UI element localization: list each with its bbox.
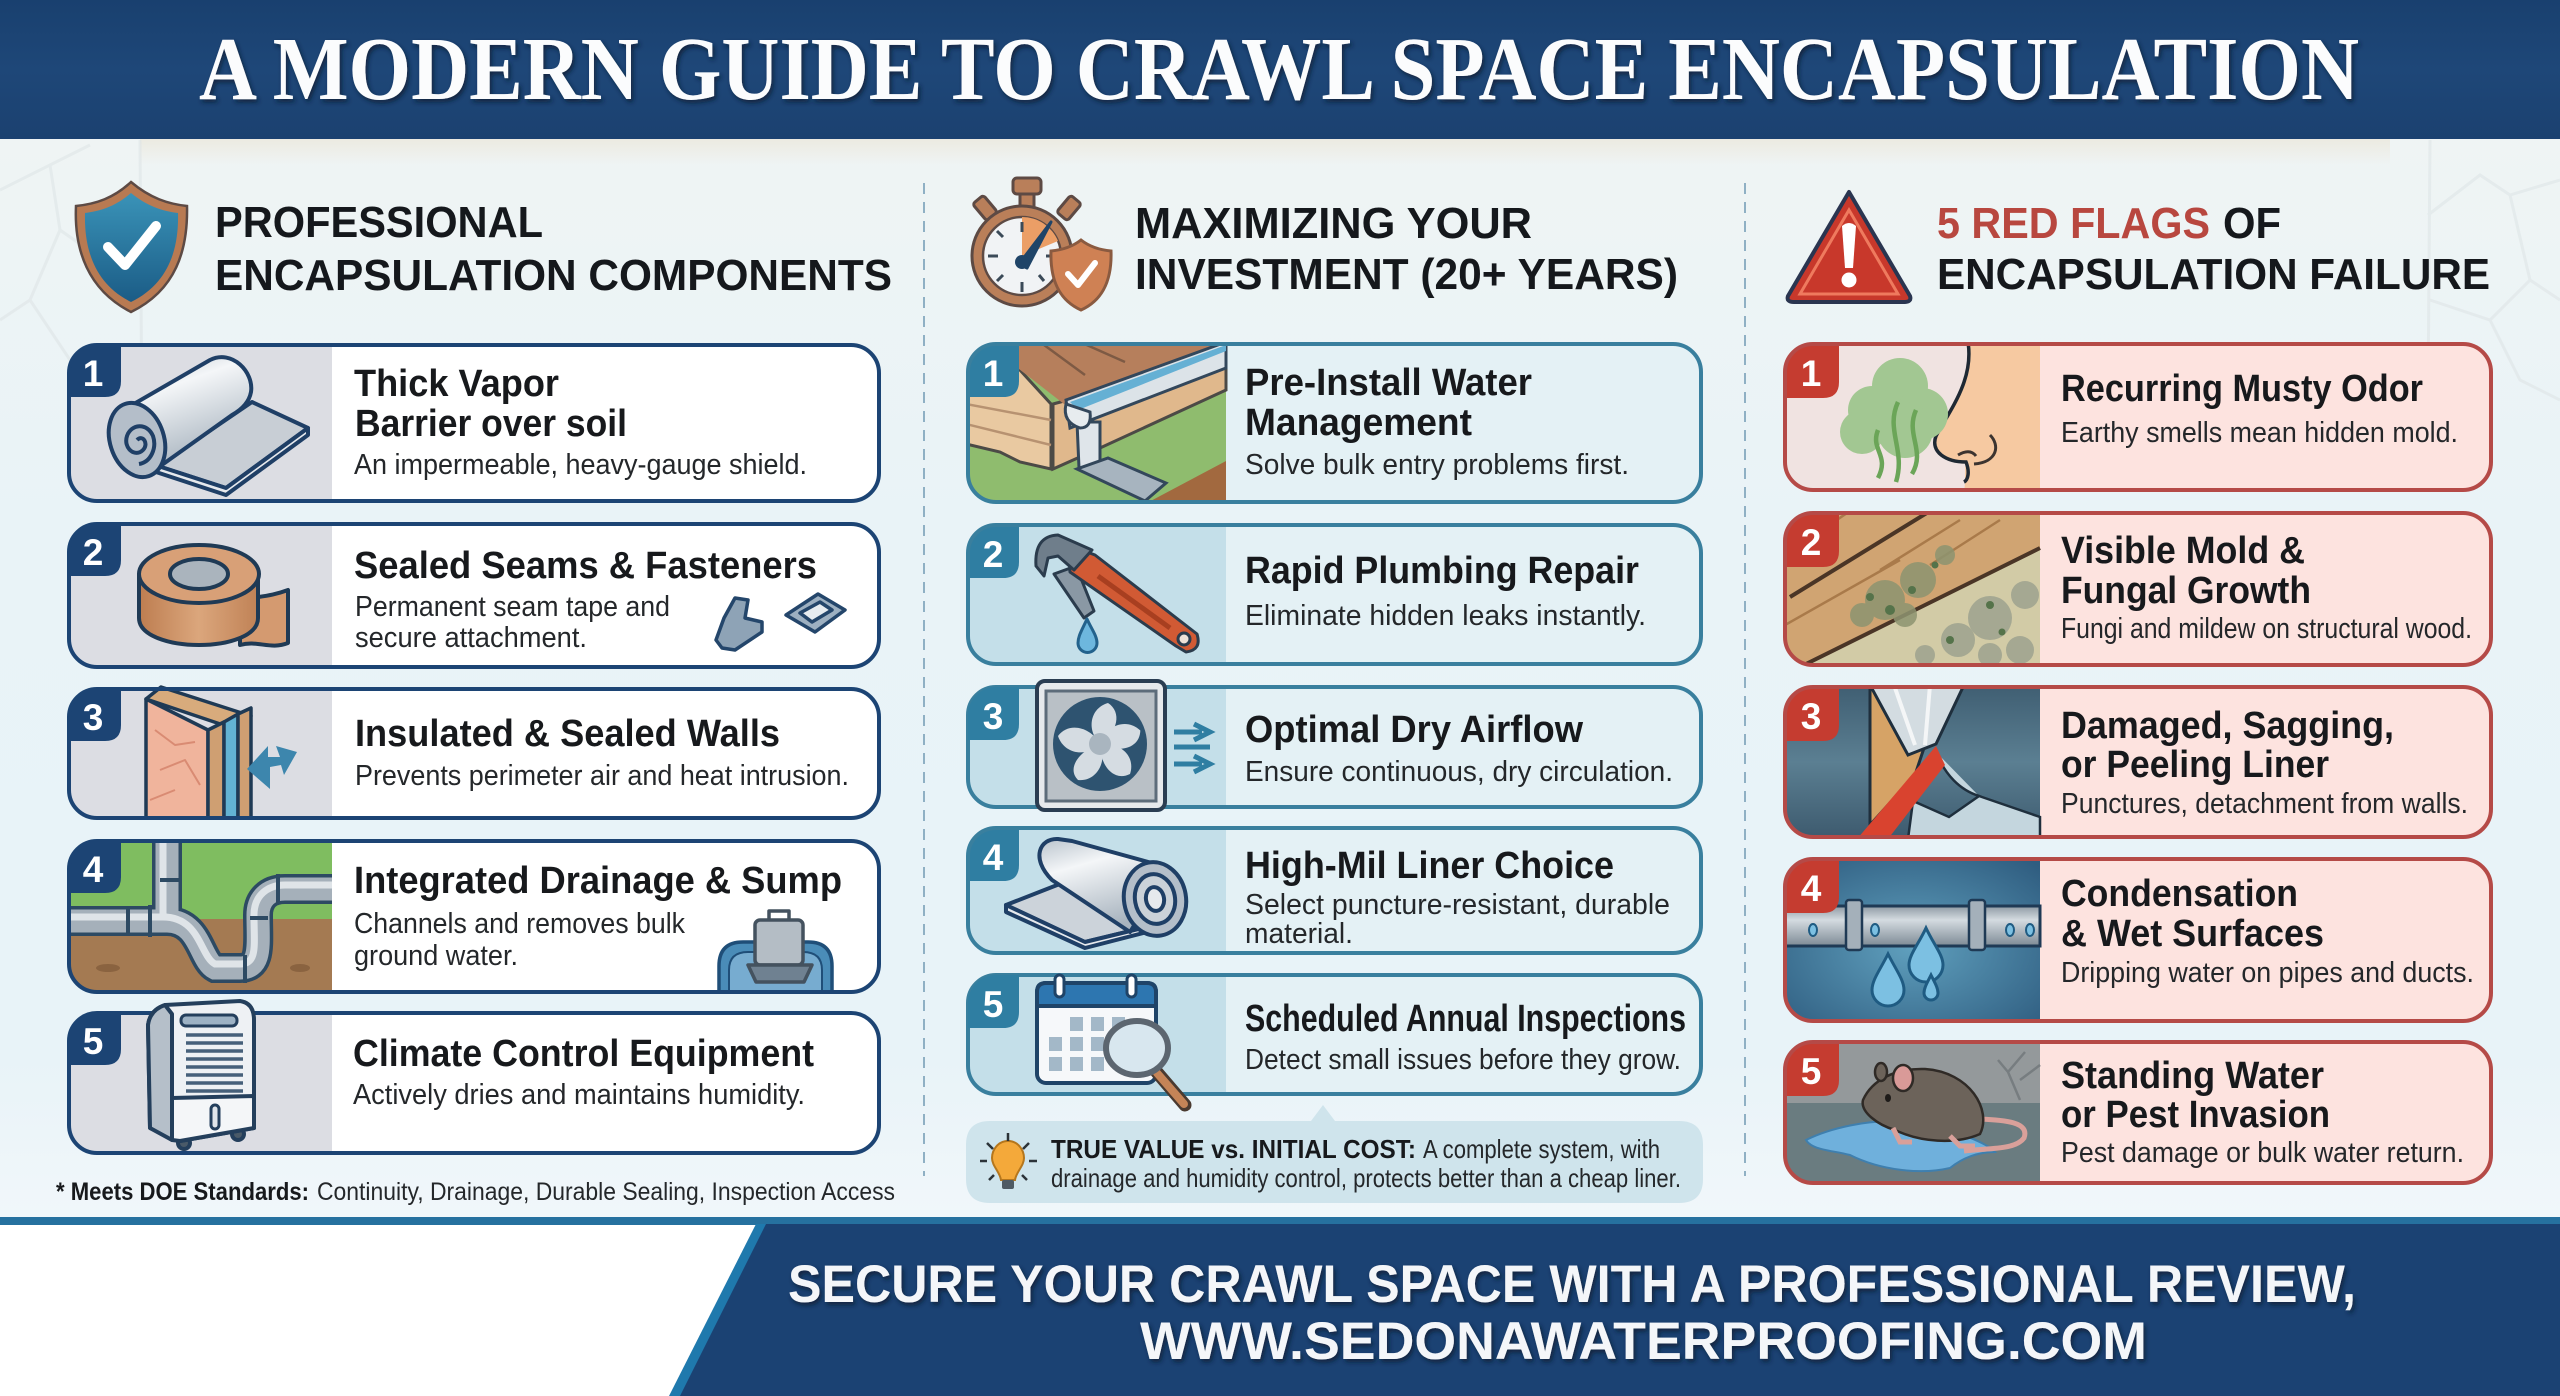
badge: 2: 2 (83, 532, 103, 573)
column 1: professional encapsulation components (56, 182, 895, 1206)
icon: stopwatch with shield (972, 178, 1111, 310)
card text: Visible Mold & (2061, 530, 2305, 572)
card text (2061, 873, 2474, 989)
card 2: visible mold and fungal growth (1783, 511, 2491, 667)
badge: 4: 4 (83, 849, 104, 890)
heading: professional encapsulation components: PROFESSIONAL (215, 198, 543, 247)
card text (1245, 362, 1629, 481)
badge: 3: 3 (1801, 696, 1821, 737)
card text: Select puncture-resistant, durable (1245, 889, 1670, 921)
card text (1245, 550, 1646, 632)
badge: 5: 5 (83, 1021, 103, 1062)
badge: 2 (1787, 515, 1839, 567)
card 1: pre-install water management (966, 342, 1701, 504)
icon: fasteners (716, 594, 845, 650)
icon: light bulb (980, 1133, 1037, 1189)
card text: ground water. (354, 940, 518, 972)
card 1: recurring musty odor (1783, 342, 2491, 492)
badge: 3: 3 (983, 696, 1003, 737)
card text: Punctures, detachment from walls. (2061, 788, 2468, 820)
icon: pipe wrench and drop (1036, 535, 1198, 652)
badge: 4 (1787, 861, 1839, 913)
badge: 3 (71, 691, 121, 741)
card text: Pest damage or bulk water return. (2061, 1137, 2464, 1169)
call to action: WWW.SEDONAWATERPROOFING.COM (1140, 1312, 2147, 1371)
column 3: red flags of encapsulation failure (1783, 192, 2491, 1185)
icon: sump pump (719, 911, 832, 992)
card text: Rapid Plumbing Repair (1245, 550, 1639, 592)
heading: maximizing your investment: INVESTMENT (20+ YEARS) (1135, 250, 1678, 299)
card 4: integrated drainage and sump (67, 839, 879, 994)
card text (2061, 368, 2458, 449)
illustration: torn liner (1783, 685, 2040, 839)
card 5: scheduled annual inspections (966, 973, 1701, 1105)
illustration: nose and musty cloud (1783, 342, 2040, 492)
heading: professional encapsulation components: ENCAPSULATION COMPONENTS (215, 251, 892, 300)
icon: warning triangle (1788, 192, 1910, 302)
card text: or Pest Invasion (2061, 1094, 2330, 1136)
card text (2061, 530, 2472, 645)
card text: Insulated & Sealed Walls (355, 713, 780, 755)
badge: 4: 4 (1801, 868, 1822, 909)
badge: 2: 2 (1801, 522, 1821, 563)
card text: Pre-Install Water (1245, 362, 1532, 404)
icon: airflow arrows (1174, 724, 1210, 772)
card text: Thick Vapor (354, 363, 559, 405)
footnote: DOE standards: Continuity, Drainage, Durable Sealing, Inspection Access (317, 1178, 895, 1206)
card text (1245, 845, 1670, 950)
illustration: dripping pipe (1783, 857, 2040, 1023)
icon: insulated wall (146, 687, 251, 818)
badge: 1: 1 (83, 353, 103, 394)
card 5: climate control equipment (67, 1001, 879, 1155)
card text: Solve bulk entry problems first. (1245, 449, 1629, 481)
call to action (788, 1255, 2356, 1371)
card text: Climate Control Equipment (353, 1033, 814, 1075)
badge: 1: 1 (983, 353, 1003, 394)
badge: 2 (71, 526, 121, 576)
card text: Earthy smells mean hidden mold. (2061, 417, 2458, 449)
badge: 1 (1787, 346, 1839, 398)
illustration: gutter and downspout (966, 342, 1226, 504)
card text: Standing Water (2061, 1055, 2324, 1097)
callout: true value vs. initial cost (966, 1105, 1703, 1203)
card text: Actively dries and maintains humidity. (353, 1079, 805, 1111)
column 2: maximizing your investment (966, 178, 1703, 1203)
card text: High-Mil Liner Choice (1245, 845, 1614, 887)
badge: 4 (71, 843, 121, 893)
card text: secure attachment. (355, 622, 587, 654)
badge: 1 (970, 346, 1019, 397)
card text (2061, 705, 2468, 820)
card text (354, 860, 842, 972)
footer banner (0, 1217, 2560, 1396)
card 5: standing water or pest invasion (1783, 1040, 2491, 1185)
card text (355, 713, 849, 792)
card text: Fungal Growth (2061, 570, 2311, 612)
badge: 5 (966, 973, 1019, 1028)
badge: 5: 5 (983, 984, 1003, 1025)
illustration: moldy wood (1783, 511, 2040, 667)
card text: Detect small issues before they grow. (1245, 1044, 1681, 1076)
badge: 5 (1783, 1040, 1839, 1096)
badge: 5: 5 (1801, 1051, 1821, 1092)
heading: red flags: ENCAPSULATION FAILURE (1937, 250, 2490, 299)
badge: 1 (71, 347, 121, 397)
badge: 4: 4 (983, 837, 1004, 878)
card 2: sealed seams and fasteners (67, 522, 879, 669)
badge: 2: 2 (983, 534, 1003, 575)
icon: shield with check (76, 182, 187, 312)
card 4: high-mil liner choice (966, 826, 1701, 955)
heading: red flags: 5 RED FLAGS (1937, 199, 2210, 248)
card text (354, 545, 817, 654)
card 1: thick vapor barrier (67, 343, 879, 503)
card text: Damaged, Sagging, (2061, 705, 2394, 747)
title: A MODERN GUIDE TO CRAWL SPACE ENCAPSULATION (199, 20, 2359, 119)
card text: Ensure continuous, dry circulation. (1245, 756, 1673, 788)
card text: Eliminate hidden leaks instantly. (1245, 600, 1646, 632)
card text (1245, 998, 1686, 1076)
badge: 4 (970, 830, 1019, 881)
icon: seam tape (139, 545, 288, 646)
card text: An impermeable, heavy-gauge shield. (354, 449, 807, 481)
card text: or Peeling Liner (2061, 744, 2329, 786)
icon: liner roll (100, 357, 308, 495)
illustration: drain pipes in soil (67, 839, 332, 994)
heading: maximizing your investment (1135, 199, 1678, 299)
footnote: DOE standards (56, 1178, 895, 1206)
card 2: rapid plumbing repair (966, 523, 1701, 666)
card text (1245, 709, 1673, 788)
card text: Dripping water on pipes and ducts. (2061, 957, 2474, 989)
heading: red flags: OF (2223, 199, 2281, 248)
badge: 5 (71, 1015, 121, 1065)
heading: maximizing your investment: MAXIMIZING YOUR (1135, 199, 1532, 248)
card text: Optimal Dry Airflow (1245, 709, 1583, 751)
callout text: TRUE VALUE vs. INITIAL COST: (1051, 1134, 1416, 1164)
card 4: condensation and wet surfaces (1783, 857, 2491, 1023)
icon: liner roll (1006, 839, 1192, 948)
card text: Fungi and mildew on structural wood. (2061, 613, 2472, 645)
card text: Sealed Seams & Fasteners (354, 545, 817, 587)
card text: Condensation (2061, 873, 2298, 915)
card text: Integrated Drainage & Sump (354, 860, 842, 902)
badge: 3: 3 (83, 697, 103, 738)
callout text: A complete system, with (1423, 1134, 1660, 1164)
card text: Permanent seam tape and (355, 591, 670, 623)
card text: & Wet Surfaces (2061, 913, 2324, 955)
badge: 1: 1 (1801, 353, 1821, 394)
badge: 3 (1787, 689, 1839, 741)
card text: Channels and removes bulk (354, 908, 685, 940)
icon: calendar with magnifier (1037, 975, 1185, 1105)
card text (2061, 1055, 2464, 1169)
heading: red flags (1937, 199, 2490, 299)
badge: 3 (966, 685, 1019, 740)
card text: Management (1245, 402, 1472, 444)
call to action: SECURE YOUR CRAWL SPACE WITH A PROFESSIONAL REVIEW, (788, 1255, 2356, 1314)
callout text: drainage and humidity control, protects better than a cheap liner. (1051, 1163, 1681, 1193)
footnote: DOE standards: * Meets DOE Standards: (56, 1178, 309, 1206)
card text: Prevents perimeter air and heat intrusion. (355, 760, 849, 792)
title banner (0, 0, 2560, 139)
card 3: insulated and sealed walls (67, 687, 879, 820)
icon: ventilation fan (1037, 681, 1165, 810)
card 3: optimal dry airflow (966, 681, 1701, 810)
icon: dehumidifier (148, 1001, 254, 1149)
card text (354, 363, 807, 481)
card text: material. (1245, 918, 1353, 950)
card text: Barrier over soil (355, 403, 627, 445)
card text (353, 1033, 814, 1111)
card text: Recurring Musty Odor (2061, 368, 2423, 410)
card text: Scheduled Annual Inspections (1245, 998, 1686, 1040)
heading: professional encapsulation components (215, 198, 892, 300)
callout text (1051, 1134, 1681, 1193)
badge: 2 (970, 527, 1019, 578)
illustration: rat in puddle (1783, 1040, 2040, 1185)
card 3: damaged, sagging or peeling liner (1783, 685, 2491, 839)
icon: double arrow (247, 746, 297, 789)
